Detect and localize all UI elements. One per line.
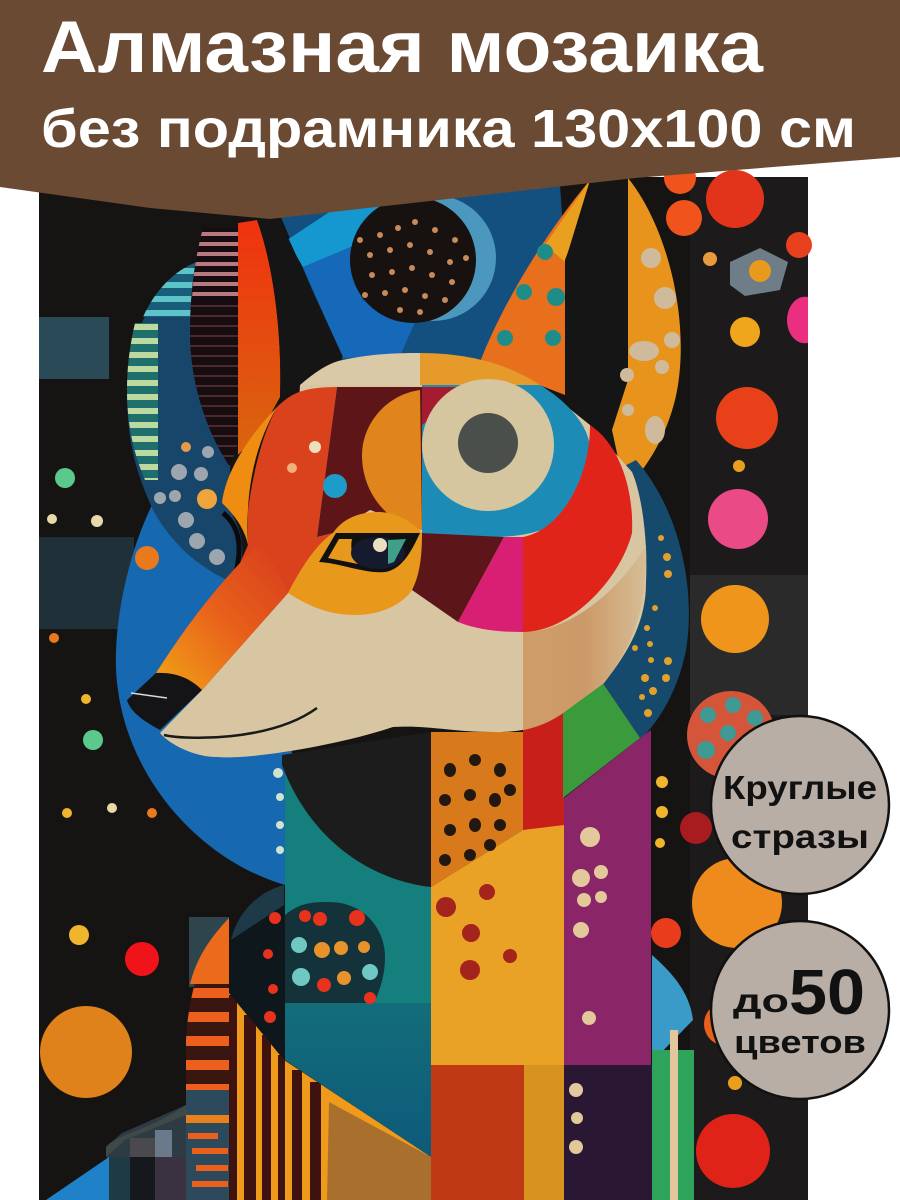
background dots: [40, 162, 812, 1188]
blue shape behind ears: [280, 185, 565, 365]
eye patch: [288, 512, 422, 615]
header banner: [0, 0, 900, 219]
blue circle behind head: [116, 505, 300, 885]
fox head: [127, 353, 646, 757]
badge: round rhinestones: стразы: [731, 818, 869, 855]
dark blue circle behind neck: [560, 460, 689, 740]
badge: round rhinestones: Круглые: [723, 769, 877, 806]
eye: [319, 533, 420, 572]
subtitle: без подрамника 130х100 см: [41, 99, 856, 159]
badge: up to 50 colours: цветов: [734, 1024, 866, 1060]
badge: round rhinestones: [711, 716, 889, 894]
fox left ear: [127, 220, 343, 583]
body dots: [263, 535, 672, 1154]
lower left striped arc: [46, 885, 431, 1200]
badge: up to 50 colours: до: [733, 982, 789, 1019]
badge: up to 50 colours: [711, 921, 889, 1099]
snout and nose: [164, 708, 317, 738]
ear dots: [135, 442, 225, 570]
title: Алмазная мозаика: [41, 7, 765, 88]
badge: up to 50 colours: 50: [789, 956, 865, 1028]
fox right ear: [480, 178, 681, 490]
fox body and neck blocks: [46, 682, 694, 1200]
panel: mosaic artwork: [39, 162, 812, 1200]
